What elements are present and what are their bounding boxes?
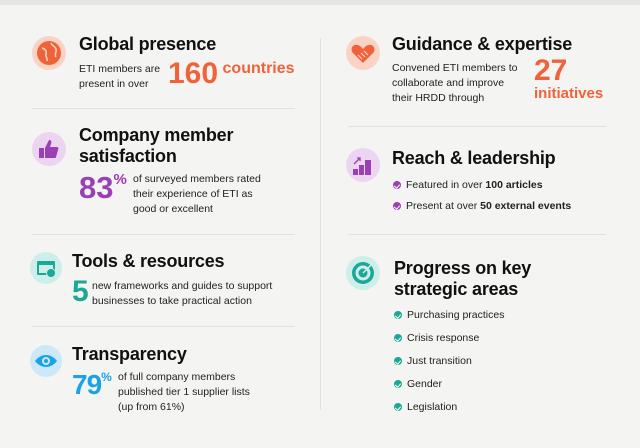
heading: satisfaction <box>79 146 177 166</box>
text <box>133 173 261 215</box>
text: new frameworks and guides to support <box>92 280 272 292</box>
text: businesses to take practical action <box>92 295 252 307</box>
stat: 79% <box>72 369 112 400</box>
panel: tools & resources <box>30 251 272 308</box>
bullets <box>393 179 571 212</box>
heading: Progress on key <box>394 258 531 278</box>
text: Convened ETI members to <box>392 62 517 74</box>
icon: browser <box>30 252 62 284</box>
heading <box>394 258 532 299</box>
bullets: Gender <box>407 378 442 390</box>
icon: thumbs up <box>32 132 66 166</box>
text: (up from 61%) <box>118 401 185 413</box>
panel: global presence <box>32 34 295 90</box>
heading: Guidance & expertise <box>392 34 572 54</box>
text: ETI members are <box>79 63 160 75</box>
text: of full company members <box>118 371 235 383</box>
stat: 5 <box>72 275 89 308</box>
text: their experience of ETI as <box>133 188 253 200</box>
text: present in over <box>79 78 148 90</box>
icon: globe <box>32 36 66 70</box>
heading: Company member <box>79 125 233 145</box>
stat <box>534 54 603 102</box>
text: of surveyed members rated <box>133 173 261 185</box>
panel: company member satisfaction <box>32 125 261 215</box>
bullets: Crisis response <box>407 332 479 344</box>
panel: progress on key strategic areas <box>346 256 532 413</box>
bullets: Legislation <box>407 401 457 413</box>
text <box>92 280 272 307</box>
panel: guidance & expertise <box>346 34 603 104</box>
heading: Transparency <box>72 344 187 364</box>
icon: handshake heart <box>346 36 380 70</box>
bullets: Present at over 50 external events <box>406 200 571 212</box>
stat: initiatives <box>534 85 603 102</box>
bullets: Purchasing practices <box>407 309 504 321</box>
icon: target <box>346 256 380 290</box>
text <box>79 63 160 90</box>
heading: strategic areas <box>394 279 518 299</box>
icon: chart <box>346 148 380 182</box>
text: good or excellent <box>133 203 213 215</box>
text <box>392 62 517 104</box>
bullets: Just transition <box>407 355 472 367</box>
text: collaborate and improve <box>392 77 504 89</box>
panel: reach & leadership <box>346 148 571 212</box>
panel: transparency <box>30 344 250 413</box>
stat: 83% <box>79 170 127 205</box>
heading: Global presence <box>79 34 216 54</box>
text: published tier 1 supplier lists <box>118 386 250 398</box>
icon: eye <box>30 345 62 377</box>
text <box>118 371 250 413</box>
stat: 27 <box>534 54 567 87</box>
heading <box>79 125 234 166</box>
heading: Reach & leadership <box>392 148 555 168</box>
text: their HRDD through <box>392 92 484 104</box>
heading: Tools & resources <box>72 251 224 271</box>
stat: 160 countries <box>168 57 295 90</box>
bullets <box>394 309 504 413</box>
bullets: Featured in over 100 articles <box>406 179 543 191</box>
